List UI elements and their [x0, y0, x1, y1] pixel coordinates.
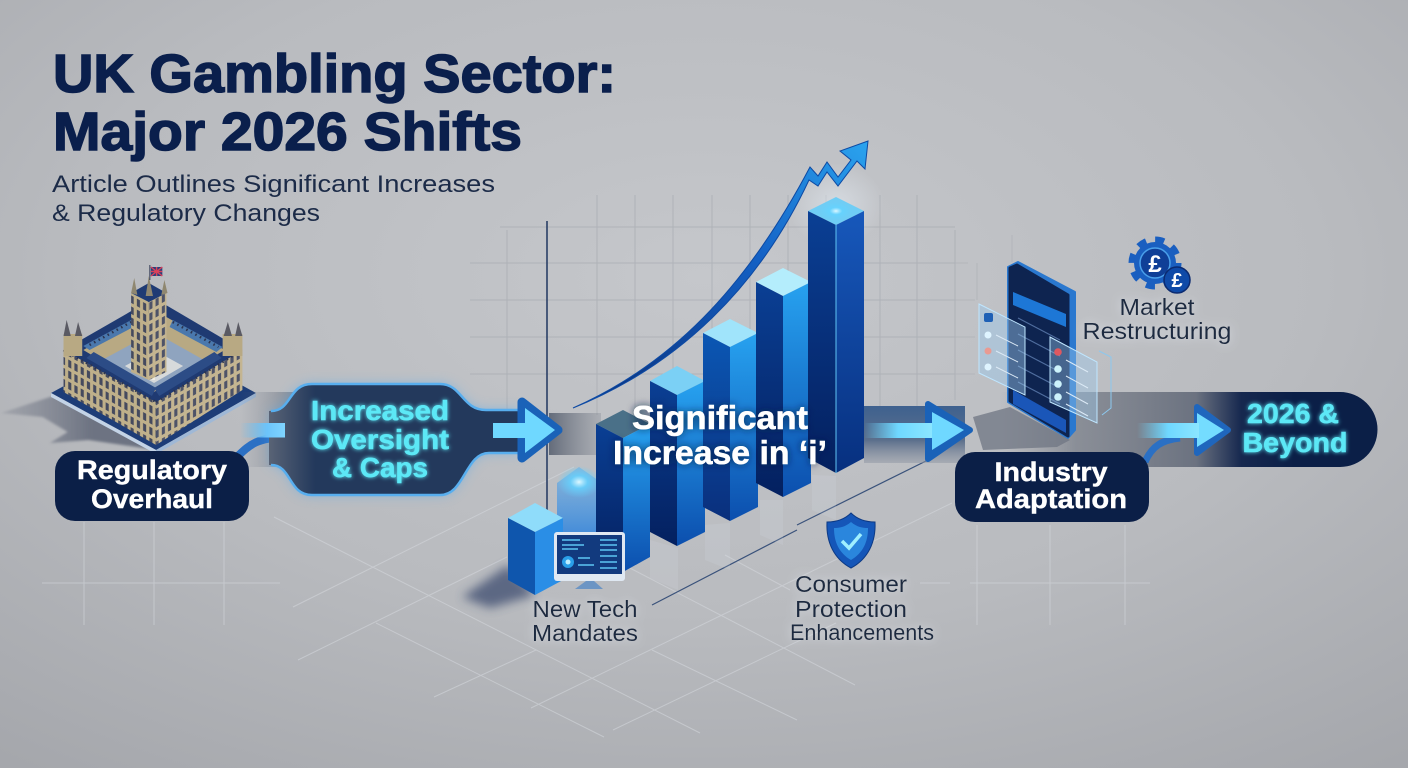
bar 6: [808, 197, 864, 473]
arrow: chart to adaptation: [864, 404, 970, 459]
bar 4: [703, 319, 758, 521]
label: consumer protection enhancements: Protection: [795, 596, 907, 622]
bar 3: [650, 366, 705, 546]
label: consumer protection enhancements: Enhancements: [790, 620, 934, 645]
text: increased oversight: & Caps: [332, 452, 428, 483]
axis line: [546, 221, 548, 510]
bar chart: [508, 197, 864, 595]
label: consumer protection enhancements: Consumer: [795, 571, 907, 597]
corner turrets: [64, 320, 242, 356]
arrow: adaptation to future: [1137, 407, 1228, 453]
trend arrow: [573, 141, 868, 408]
halo behind tallest bar: [788, 163, 884, 247]
flag: [150, 265, 162, 280]
panel: industry adaptation: [955, 452, 1149, 522]
text: regulatory overhaul: [77, 455, 227, 514]
text: 2026 and beyond: Beyond: [1242, 427, 1348, 458]
chart grid: [470, 195, 1012, 415]
band right of chart: [864, 406, 965, 463]
text: industry adaptation: Adaptation: [975, 484, 1127, 514]
title: [53, 44, 616, 162]
label: new tech mandates: Mandates: [532, 620, 638, 646]
bar 1: [508, 503, 563, 595]
text: regulatory overhaul: Overhaul: [91, 484, 213, 514]
icon: shield: [827, 513, 875, 568]
title: UK Gambling Sector:: [53, 44, 616, 104]
bar shadow: [462, 565, 535, 608]
text: 2026 and beyond: 2026 &: [1247, 398, 1339, 429]
arrow glow stem left: [240, 423, 285, 438]
glass panel left: [979, 304, 1025, 395]
heading: significant increase: Increase in ‘i’: [613, 434, 827, 471]
text: increased oversight: [311, 395, 449, 483]
bar 2: [596, 410, 650, 572]
bar: ghost: [557, 466, 602, 565]
panel: increased oversight and caps: [269, 384, 522, 495]
label: new tech mandates: New Tech: [532, 596, 638, 622]
title: Major 2026 Shifts: [53, 102, 522, 162]
label: market restructuring: Restructuring: [1082, 318, 1232, 344]
subtitle: & Regulatory Changes: [52, 200, 320, 227]
text: increased oversight: Oversight: [311, 424, 449, 455]
icon: gear with pound coins: £: [1148, 251, 1162, 278]
bar reflections: [650, 475, 836, 590]
connector curve right: [1145, 438, 1180, 462]
building shadow: [1, 395, 157, 450]
icon: phone with overlays: [979, 262, 1111, 438]
victoria tower: [131, 276, 168, 380]
label: market restructuring: [1082, 294, 1232, 344]
heading: significant increase: [613, 399, 827, 471]
subtitle: [52, 171, 495, 227]
connector curve: [238, 437, 285, 456]
text: industry adaptation: Industry: [994, 457, 1108, 487]
text: 2026 and beyond: [1242, 398, 1348, 458]
label: consumer protection enhancements: [790, 571, 934, 645]
glass panel right: [1050, 337, 1111, 423]
icon: parliament building: [1, 265, 256, 454]
text: regulatory overhaul: Regulatory: [77, 455, 227, 485]
bar 5: [756, 268, 811, 497]
text: industry adaptation: [975, 457, 1127, 514]
subtitle: Article Outlines Significant Increases: [52, 171, 495, 198]
icon: monitor: [554, 532, 625, 589]
arrow: oversight to chart: [493, 402, 558, 458]
flow band left: [240, 392, 300, 467]
icon: gear with pound coins: [1132, 240, 1190, 293]
heading: significant increase: Significant: [632, 399, 808, 436]
label: new tech mandates: [532, 596, 638, 646]
flow band middle: [549, 413, 601, 455]
band under phone: [973, 407, 1070, 450]
band: 2026 and beyond: [1000, 392, 1378, 467]
text: increased oversight: Increased: [311, 395, 449, 426]
icon: gear with pound coins: £: [1171, 270, 1183, 292]
panel: regulatory overhaul: [55, 451, 249, 521]
label: market restructuring: Market: [1120, 294, 1195, 320]
floor lines: [42, 467, 1150, 737]
